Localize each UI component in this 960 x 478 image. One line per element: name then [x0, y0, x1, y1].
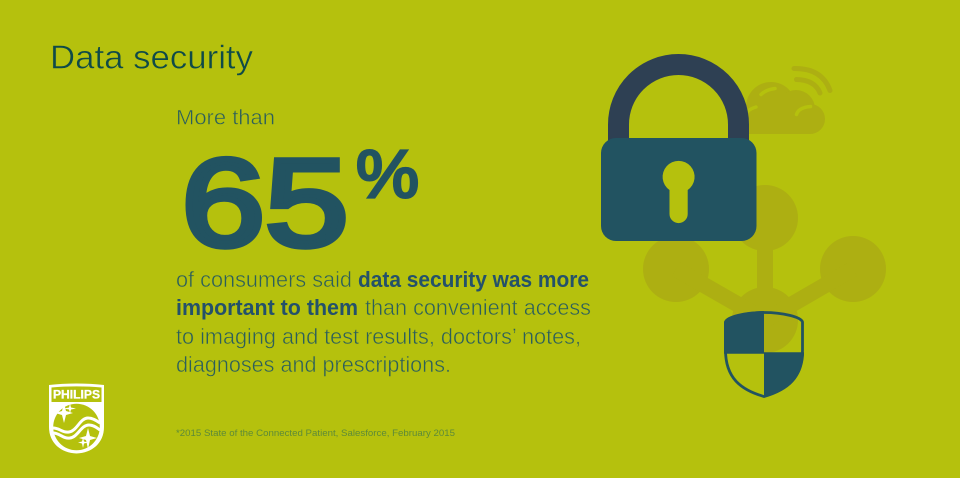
right node — [820, 236, 886, 302]
shield lower-right quarter — [764, 353, 804, 398]
percent sign: % — [356, 137, 419, 212]
cloud — [732, 82, 825, 134]
logo wordmark: PHILIPS — [53, 390, 100, 402]
logo: Philips shield — [49, 384, 104, 454]
top node — [732, 185, 798, 251]
body text: important to them — [176, 295, 358, 320]
body text: than convenient access — [365, 295, 591, 320]
logo waves — [53, 418, 100, 438]
logo globe — [53, 404, 100, 450]
connectors — [676, 218, 853, 320]
body text: data security was more — [358, 267, 589, 292]
big statistic: 65% — [182, 134, 419, 272]
body text: diagnoses and prescriptions. — [176, 352, 451, 377]
footnote: *2015 State of the Connected Patient, Salesforce, February 2015 — [176, 428, 455, 439]
wifi waves — [794, 68, 830, 93]
shield upper-left quarter — [724, 311, 764, 353]
body text: of consumers said — [176, 267, 352, 292]
logo shield inner — [52, 386, 102, 402]
icon: cloud with wifi waves — [732, 68, 830, 134]
lead-in text: More than — [176, 106, 275, 130]
shield outline — [726, 312, 802, 396]
keyhole — [663, 161, 695, 223]
logo stars — [55, 403, 97, 449]
left node — [643, 236, 709, 302]
lock body — [601, 138, 756, 241]
shackle — [618, 64, 738, 145]
shield cross line — [724, 352, 804, 354]
logo shield outer — [49, 384, 104, 454]
cloud highlights — [748, 88, 810, 114]
icon: network of nodes — [643, 185, 886, 353]
centre node — [732, 287, 798, 353]
icon: padlock — [601, 64, 756, 241]
figure 65: 65 — [182, 134, 348, 272]
body text: to imaging and test results, doctors’ notes, — [176, 324, 581, 349]
body text — [176, 267, 591, 377]
title: Data security — [50, 40, 253, 76]
icon: security shield — [724, 311, 804, 398]
